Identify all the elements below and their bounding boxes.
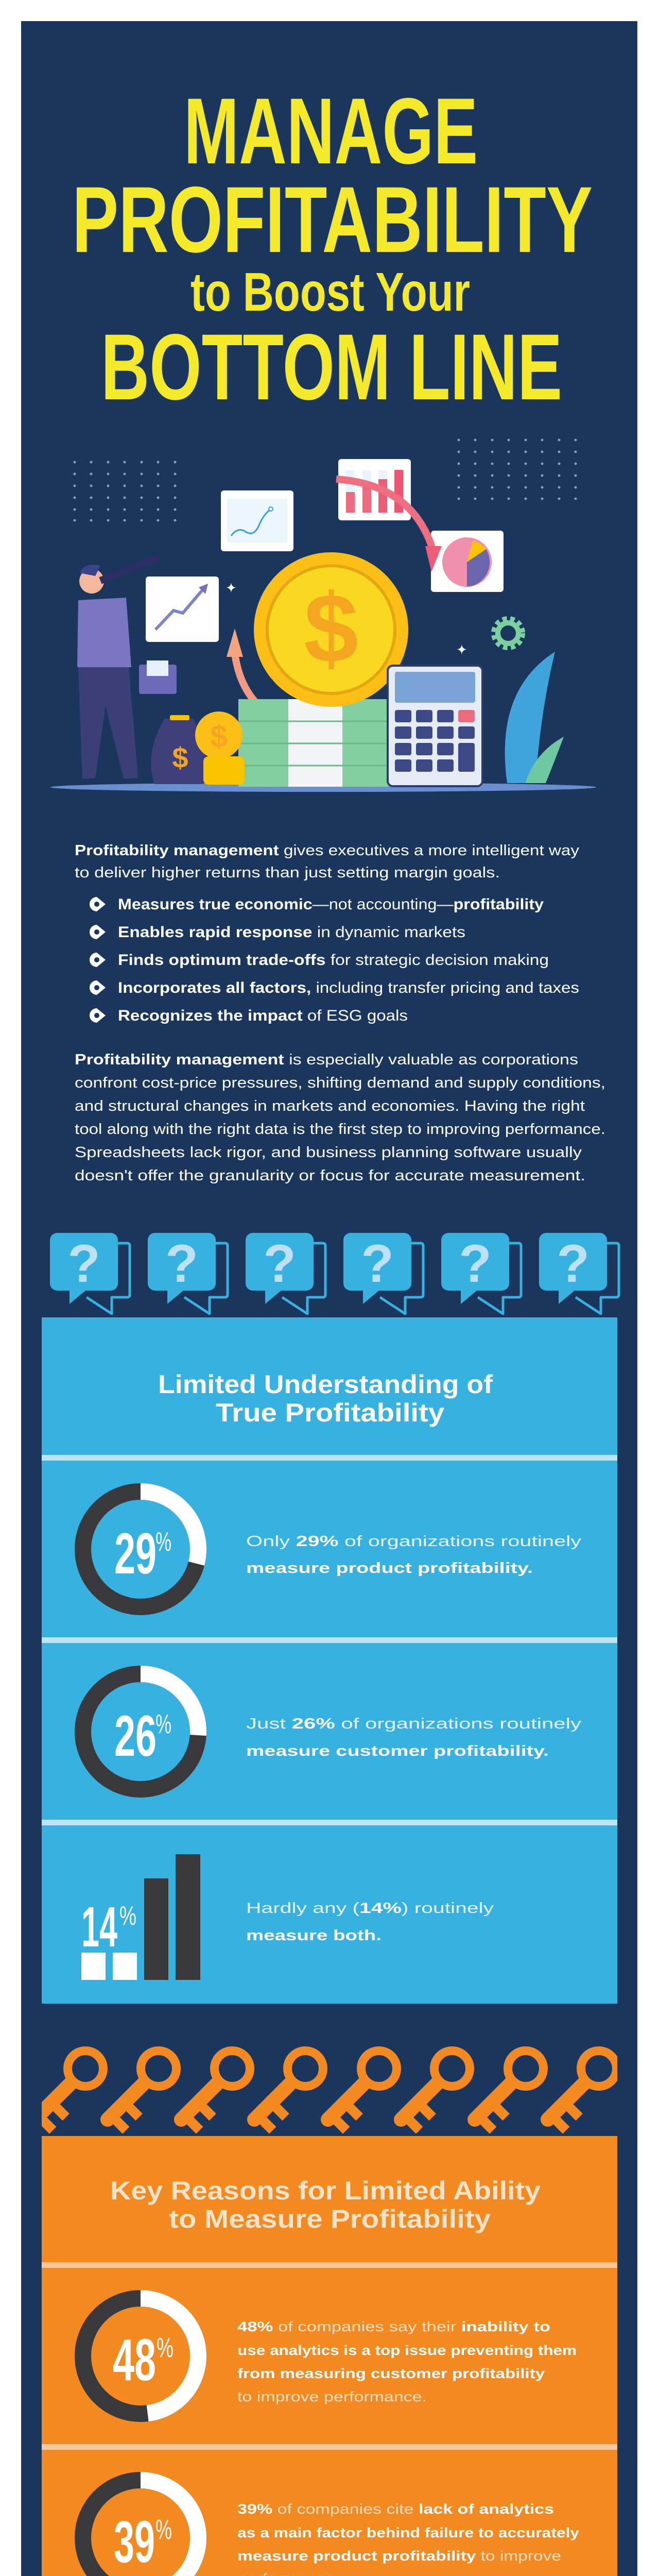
stat text 29%: Only 29% of organizations routinely xyxy=(246,1533,582,1550)
stat text 48%: to improve performance. xyxy=(237,2389,427,2404)
heading xyxy=(158,1370,493,1427)
title: to Boost Your xyxy=(190,262,470,323)
bar chart 14%: 14 xyxy=(81,1895,117,1959)
heading: Key Reasons for Limited Ability xyxy=(110,2176,541,2205)
donut 48% xyxy=(83,2298,198,2414)
stat text 48%: use analytics is a top issue preventing them xyxy=(237,2343,577,2358)
bullet 3: Finds optimum trade-offs for strategic decision making xyxy=(118,952,549,969)
paragraph 2: doesn't offer the granularity or focus for accurate measurement. xyxy=(75,1167,585,1184)
illustration: profitability scene xyxy=(50,439,596,792)
bullet 4: Incorporates all factors, including transfer pricing and taxes xyxy=(118,979,579,996)
stat text 48% xyxy=(237,2319,577,2404)
calculator xyxy=(388,666,482,786)
stat text 26%: Just 26% of organizations routinely xyxy=(246,1716,582,1732)
title xyxy=(72,78,593,419)
stat text 39%: 39% of companies cite lack of analytics xyxy=(237,2501,554,2517)
donut 48%: % xyxy=(157,2332,174,2363)
intro text: Profitability management gives executives a more intelligent way xyxy=(75,842,580,859)
paragraph 2: and structural changes in markets and economies. Having the right xyxy=(75,1098,585,1114)
intro text xyxy=(75,842,580,881)
stat text 14%: measure both. xyxy=(246,1927,381,1944)
donut 39%: 39 xyxy=(114,2509,155,2575)
coin xyxy=(254,552,408,707)
bullet list xyxy=(90,896,579,1024)
illustration: profitability scene: $ xyxy=(172,741,188,774)
donut 29%: % xyxy=(155,1527,171,1557)
illustration: profitability scene: $ xyxy=(210,719,228,754)
stat text 26%: measure customer profitability. xyxy=(246,1743,549,1759)
stat text 29% xyxy=(246,1533,582,1577)
title: MANAGE xyxy=(184,78,478,183)
pie chart card xyxy=(431,531,504,592)
dot grid left xyxy=(73,461,176,521)
panel: key reasons xyxy=(42,2136,617,2576)
paragraph 2: Profitability management is especially valuable as corporations xyxy=(75,1052,578,1068)
money bag and coins xyxy=(151,719,206,784)
donut 29%: 29 xyxy=(114,1521,157,1586)
paragraph 2 xyxy=(75,1052,605,1184)
bullet 5: Recognizes the impact of ESG goals xyxy=(118,1007,408,1024)
bar chart card xyxy=(338,459,411,520)
donut 26% xyxy=(83,1674,198,1789)
gear xyxy=(495,620,522,647)
stat text 39%: as a main factor behind failure to accurately xyxy=(237,2525,579,2540)
donut 29% xyxy=(83,1492,198,1607)
paragraph 2: confront cost-price pressures, shifting demand and supply conditions, xyxy=(75,1075,605,1091)
arrow chart card xyxy=(146,577,219,642)
paragraph 2: Spreadsheets lack rigor, and business planning software usually xyxy=(75,1144,582,1161)
dot grid right xyxy=(457,439,577,500)
bullet 1: Measures true economic —not accounting— profitability xyxy=(118,896,544,913)
stat text 39% xyxy=(237,2501,579,2576)
donut 26%: % xyxy=(155,1709,171,1739)
bullet 2: Enables rapid response in dynamic markets xyxy=(118,924,465,941)
icons: keys xyxy=(24,2050,617,2139)
donut 26%: 26 xyxy=(114,1704,157,1768)
stat text 26% xyxy=(246,1716,582,1759)
stat text 29%: measure product profitability. xyxy=(246,1560,533,1577)
line chart card xyxy=(221,490,293,551)
paragraph 2: tool along with the right data is the first step to improving performance. xyxy=(75,1121,605,1138)
stat text 39%: measure product profitability to improve xyxy=(237,2548,561,2564)
person with telescope xyxy=(79,569,104,594)
donut 39%: % xyxy=(155,2514,172,2545)
donut 39% xyxy=(83,2480,198,2576)
leaves xyxy=(505,652,555,783)
money stack xyxy=(238,699,389,787)
stat text 48%: 48% of companies say their inability to xyxy=(237,2319,550,2334)
heading: Limited Understanding of xyxy=(158,1370,493,1399)
stat text 48%: from measuring customer profitability xyxy=(237,2366,545,2381)
intro text: to deliver higher returns than just setting margin goals. xyxy=(75,865,500,881)
stat text 14%: Hardly any ( 14% ) routinely xyxy=(246,1900,494,1917)
bar chart 14% xyxy=(81,1854,200,1980)
heading: to Measure Profitability xyxy=(169,2205,491,2233)
heading: True Profitability xyxy=(216,1398,444,1427)
circular arrows xyxy=(336,479,432,549)
ground xyxy=(50,783,596,792)
icons: question bubbles xyxy=(50,1233,619,1314)
bar chart 14%: % xyxy=(119,1901,136,1931)
stat text 14% xyxy=(246,1900,494,1944)
illustration: profitability scene: $ xyxy=(304,574,358,683)
heading xyxy=(110,2176,541,2233)
envelope xyxy=(139,665,177,694)
illustration: profitability scene: ✦ xyxy=(456,642,467,657)
donut 48%: 48 xyxy=(113,2327,156,2393)
sparkles: ✦ xyxy=(226,580,237,596)
panel: limited understanding xyxy=(42,1317,617,2004)
